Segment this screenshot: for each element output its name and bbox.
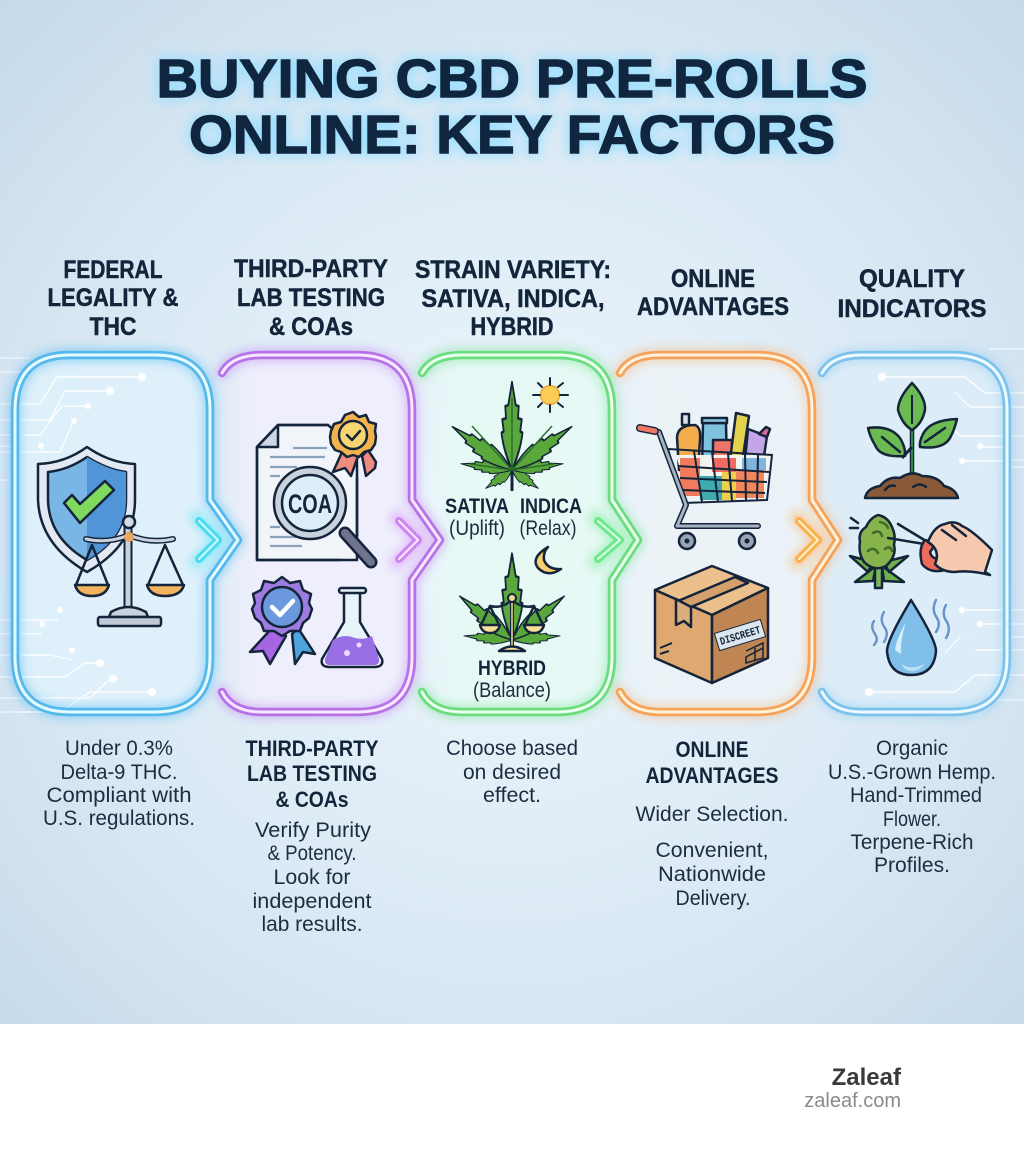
label: hybrid: (Balance) — [473, 679, 551, 702]
icon: COA document — [257, 412, 376, 562]
icon: sprout — [865, 383, 958, 498]
arrow — [797, 518, 820, 562]
text block: online advantages: ONLINE — [676, 737, 748, 762]
text block: federal legality — [43, 737, 195, 830]
panel: lab testing — [222, 355, 440, 712]
panel backgrounds — [15, 355, 1007, 712]
arrow — [397, 518, 420, 562]
text block: lab testing: & COAs — [276, 787, 348, 812]
icon: water drop — [872, 600, 949, 675]
heading: lab testing — [234, 255, 388, 341]
text block: quality indicators: Terpene-Rich — [850, 831, 974, 854]
heading: lab testing: LAB TESTING — [237, 284, 385, 312]
heading: federal legality: LEGALITY & — [48, 284, 178, 312]
text block: federal legality: Delta-9 THC. — [60, 761, 178, 784]
heading: online advantages: ONLINE — [671, 265, 755, 293]
heading: strain variety: SATIVA, INDICA, — [422, 285, 604, 313]
label: sativa and indica — [445, 495, 582, 540]
text block: lab testing: & Potency. — [268, 842, 356, 865]
title: ONLINE: KEY FACTORS — [189, 105, 835, 165]
heading: strain variety — [415, 256, 611, 341]
text block: quality indicators: Profiles. — [874, 854, 950, 877]
icon: discreet box — [655, 566, 768, 683]
label: sativa and indica: INDICA — [520, 495, 582, 518]
text block: lab testing: lab results. — [262, 913, 362, 936]
icon: discreet box: DISCREET — [719, 625, 763, 649]
icon: sativa leaf — [447, 382, 577, 493]
heading: online advantages: ADVANTAGES — [637, 293, 789, 321]
panel: online advantages — [620, 355, 838, 712]
icon: sun — [533, 378, 568, 412]
text block: lab testing: Verify Purity — [255, 819, 372, 842]
text block: federal legality: U.S. regulations. — [43, 807, 195, 830]
label: sativa and indica: (Uplift) — [449, 517, 505, 540]
heading: federal legality — [48, 256, 178, 341]
decorative circuit lines — [0, 349, 1024, 712]
text block: strain variety: on desired — [463, 761, 561, 784]
arrow — [596, 518, 621, 562]
label: hybrid: HYBRID — [478, 657, 546, 680]
icon: balance scale — [75, 516, 184, 626]
text block: online advantages: ADVANTAGES — [646, 763, 778, 788]
title — [156, 49, 868, 165]
text block: strain variety: effect. — [483, 784, 541, 807]
text block: federal legality: Compliant with — [46, 784, 192, 807]
brand: Zaleaf — [832, 1064, 902, 1091]
text block: strain variety — [446, 737, 578, 807]
text block: federal legality: Under 0.3% — [65, 737, 173, 760]
panel: strain variety — [422, 355, 638, 712]
heading: lab testing: THIRD-PARTY — [234, 255, 388, 283]
text block: strain variety: Choose based — [446, 737, 578, 760]
icon: flask — [322, 588, 382, 667]
icon: hand trimming bud — [850, 515, 992, 588]
text block: quality indicators: U.S.-Grown Hemp. — [828, 761, 996, 784]
heading: quality indicators: QUALITY — [859, 265, 965, 293]
icon: purple rosette — [250, 577, 315, 664]
text block: quality indicators: Organic — [876, 737, 948, 760]
footer band — [0, 1024, 1024, 1154]
text block: quality indicators: Flower. — [883, 808, 941, 831]
brand: zaleaf.com — [804, 1090, 901, 1112]
text block: online advantages: Convenient, — [656, 839, 768, 862]
text block: quality indicators: Hand-Trimmed — [850, 784, 982, 807]
heading: quality indicators: INDICATORS — [838, 295, 986, 323]
label: hybrid — [473, 657, 551, 702]
panel: quality indicators — [822, 355, 1007, 712]
heading: lab testing: & COAs — [269, 313, 353, 341]
icon: COA document: COA — [288, 489, 332, 519]
text block: online advantages — [636, 737, 788, 910]
text block: quality indicators — [828, 737, 996, 877]
icon: shield with check — [38, 447, 135, 572]
panel: federal legality — [15, 355, 238, 712]
text block: online advantages: Wider Selection. — [636, 803, 788, 826]
text block: lab testing: LAB TESTING — [247, 761, 377, 786]
text block: lab testing: THIRD-PARTY — [246, 736, 379, 761]
heading: federal legality: FEDERAL — [64, 256, 162, 284]
label: sativa and indica: SATIVA — [445, 495, 509, 518]
title: ONLINE: KEY FACTORS — [189, 105, 835, 165]
text block: lab testing: Look for — [274, 866, 350, 889]
icon: hybrid leaf with scale — [455, 554, 569, 651]
heading: quality indicators — [838, 265, 986, 323]
text block: lab testing — [246, 736, 379, 936]
heading: strain variety: STRAIN VARIETY: — [415, 256, 611, 284]
arrow — [197, 518, 220, 562]
label: sativa and indica: (Relax) — [520, 517, 576, 540]
text block: online advantages: Delivery. — [676, 887, 750, 910]
icon: gold seal — [330, 412, 376, 476]
text block: lab testing: independent — [252, 890, 372, 913]
title: BUYING CBD PRE-ROLLS — [156, 49, 868, 109]
icon: shopping cart — [640, 413, 772, 549]
heading: federal legality: THC — [90, 313, 136, 341]
icon: moon — [536, 547, 561, 573]
title: BUYING CBD PRE-ROLLS — [156, 49, 868, 109]
heading: strain variety: HYBRID — [470, 313, 554, 341]
heading: online advantages — [637, 265, 789, 321]
brand — [804, 1064, 902, 1112]
text block: online advantages: Nationwide — [658, 863, 766, 886]
